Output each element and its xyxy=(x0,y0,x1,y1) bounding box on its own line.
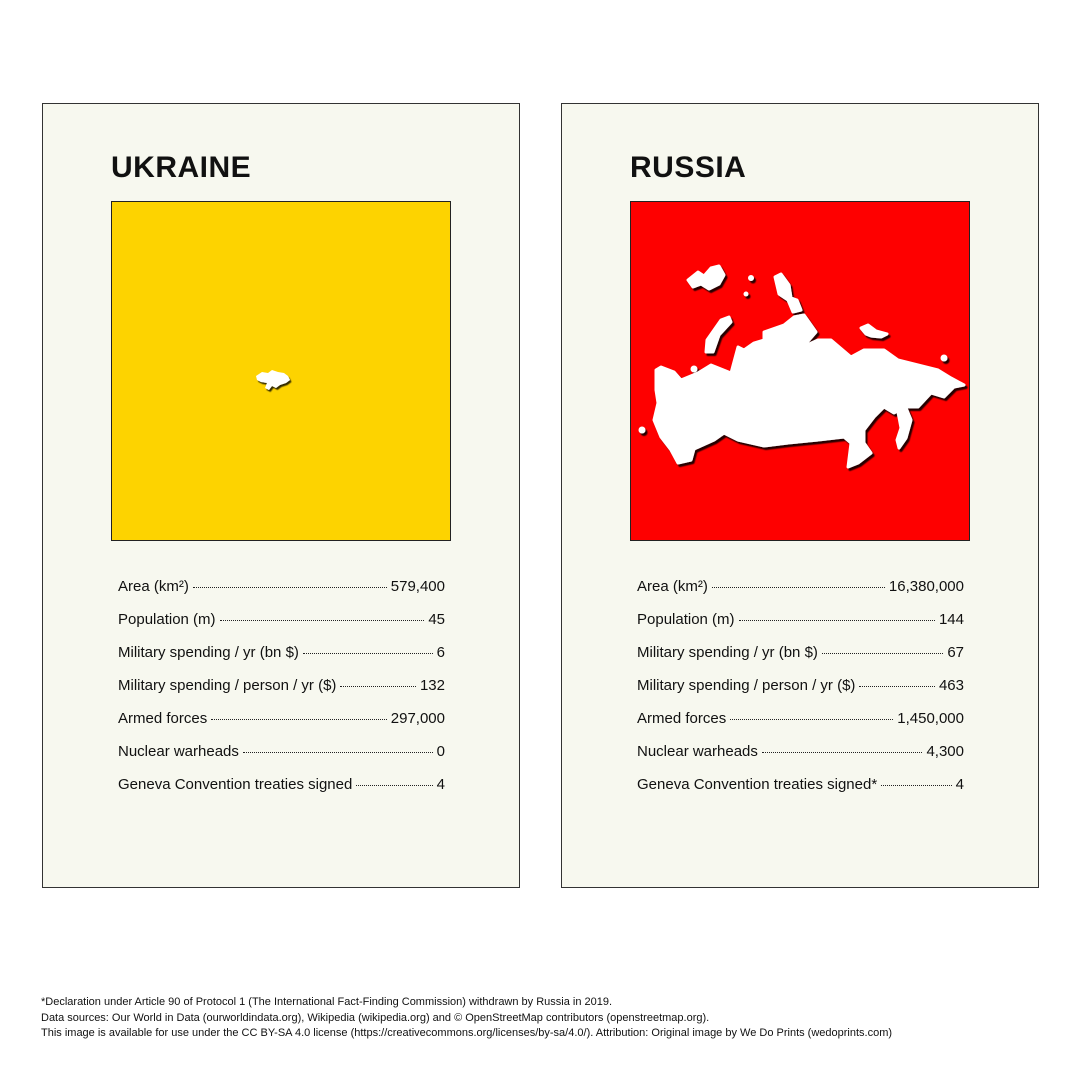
footer notes xyxy=(41,996,892,1039)
panel: russia xyxy=(561,103,1039,888)
stats: ukraine: Population (m) xyxy=(118,611,216,628)
map: russia xyxy=(630,201,970,541)
stats: ukraine: Nuclear warheads xyxy=(118,743,239,760)
stats: ukraine: Military spending / yr (bn $) xyxy=(118,644,299,661)
heading: russia: RUSSIA xyxy=(630,151,746,184)
stats: ukraine: Geneva Convention treaties signed xyxy=(118,776,352,793)
stats: russia: 67 xyxy=(947,644,964,661)
stats: russia: 1,450,000 xyxy=(897,710,964,727)
stats: russia: Population (m) xyxy=(637,611,735,628)
stats: russia: Area (km²) xyxy=(637,578,708,595)
footer notes: *Declaration under Article 90 of Protocol 1 (The International Fact-Finding Commission) withdrawn by Russia in 2019. xyxy=(41,996,612,1008)
footer notes: This image is available for use under the CC BY-SA 4.0 license (https://creativecommons.org/licenses/by-sa/4.0/). Attribution: Original image by We Do Prints (wedoprints.com) xyxy=(41,1027,892,1039)
stats: ukraine: 132 xyxy=(420,677,445,694)
footer notes: Data sources: Our World in Data (ourworldindata.org), Wikipedia (wikipedia.org) and © OpenStreetMap contributors (openstreetmap.org). xyxy=(41,1012,709,1024)
stats: ukraine: Area (km²) xyxy=(118,578,189,595)
stats: ukraine: 45 xyxy=(428,611,445,628)
stats: russia: Military spending / yr (bn $) xyxy=(637,644,818,661)
stats: ukraine: 6 xyxy=(437,644,445,661)
stats: ukraine xyxy=(118,578,445,793)
stats: russia: 16,380,000 xyxy=(889,578,964,595)
stats: ukraine: 579,400 xyxy=(391,578,445,595)
heading: ukraine: UKRAINE xyxy=(111,151,251,184)
stats: russia: Armed forces xyxy=(637,710,726,727)
stats: russia: 4 xyxy=(956,776,964,793)
stats: ukraine: Armed forces xyxy=(118,710,207,727)
stats: ukraine: 297,000 xyxy=(391,710,445,727)
stats: russia: 4,300 xyxy=(926,743,964,760)
stats: russia: 463 xyxy=(939,677,964,694)
stats: russia: Nuclear warheads xyxy=(637,743,758,760)
map: ukraine xyxy=(111,201,451,541)
stats: ukraine: 0 xyxy=(437,743,445,760)
stats: russia: 144 xyxy=(939,611,964,628)
stats: russia: Geneva Convention treaties signed* xyxy=(637,776,877,793)
stats: ukraine: Military spending / person / yr ($) xyxy=(118,677,336,694)
stats: ukraine: 4 xyxy=(437,776,445,793)
stats: russia: Military spending / person / yr ($) xyxy=(637,677,855,694)
stats: russia xyxy=(637,578,964,793)
panel: ukraine xyxy=(42,103,520,888)
